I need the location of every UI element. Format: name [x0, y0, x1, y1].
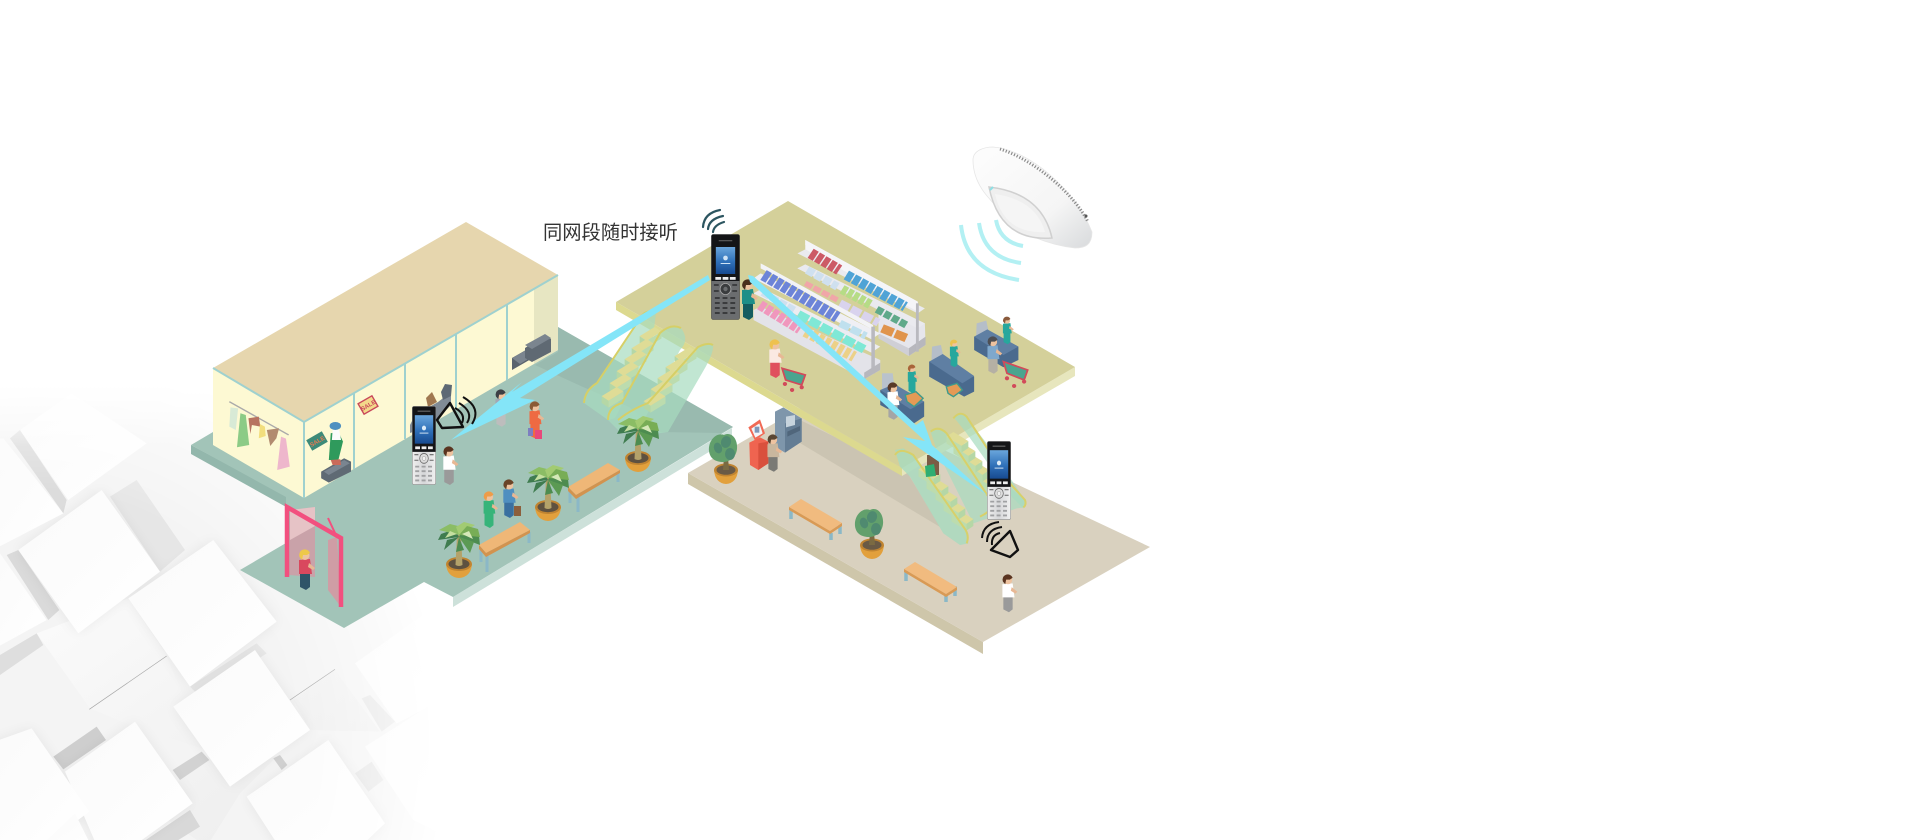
cashier 1 [908, 365, 919, 393]
person with bags [528, 401, 544, 439]
kiosk and ATM [748, 407, 802, 470]
steps [918, 432, 997, 531]
baskets [905, 383, 962, 407]
escalators: right pair to beige floor [895, 413, 1026, 545]
shelves and products [754, 240, 926, 379]
icon: speaker on green floor [437, 397, 475, 428]
phone: white handset on beige floor [987, 441, 1011, 520]
counter 2 [929, 345, 974, 397]
bench 2 [479, 522, 530, 572]
person at door [299, 549, 315, 590]
staff by dark phone [742, 279, 758, 320]
ATM [775, 407, 802, 453]
steps right [644, 347, 696, 413]
store roof [213, 222, 558, 422]
shopping carts [782, 362, 1028, 392]
cashier 3 [1003, 317, 1014, 344]
display benches [512, 334, 551, 370]
sign: red sale [358, 396, 378, 414]
sign: green sale [306, 431, 328, 451]
lower floor: beige level [688, 394, 1150, 654]
phone: white handset on green floor [412, 406, 436, 485]
upper floor: yellow level [616, 201, 1075, 476]
background: grey isometric tile pattern [0, 430, 395, 840]
icon: speaker on beige floor [982, 522, 1018, 557]
cashier 2 [950, 340, 961, 367]
mannequin on plinth [321, 422, 351, 483]
store building [213, 222, 558, 498]
bench 1 [568, 463, 620, 512]
signal arrow to beige floor [748, 275, 987, 495]
man in blue [503, 479, 521, 518]
icon: wifi over handset [703, 210, 724, 232]
escalators: left pair to green floor [584, 312, 713, 436]
person at front [1002, 574, 1017, 612]
shoe display [410, 384, 452, 433]
ceiling access point [973, 147, 1092, 248]
person at ATM [767, 434, 782, 472]
bench 3 [789, 499, 842, 540]
potted palm trees [438, 416, 659, 578]
ticket kiosk [748, 419, 768, 470]
sign: red sale: SALE [360, 400, 377, 413]
benches [479, 463, 957, 602]
shopper with cart [769, 339, 784, 378]
woman in green [484, 491, 498, 528]
sign: green sale: SALE [309, 436, 326, 449]
counter 3 [974, 321, 1018, 367]
potted round trees [709, 434, 884, 559]
phone: dark handset on upper floor [711, 234, 740, 320]
bench 4 [904, 562, 957, 602]
entrance door [287, 507, 341, 607]
customer 1 [887, 382, 902, 420]
store side walls [213, 368, 304, 498]
person on escalator [925, 455, 939, 477]
person grey [495, 389, 510, 427]
signal arrow to green floor [451, 275, 710, 440]
customer 3 [987, 336, 1002, 374]
signal waves from access point [961, 220, 1023, 280]
checkout counters [782, 321, 1028, 423]
front shelf [754, 263, 880, 379]
clothes rack [229, 402, 290, 470]
text: label: 同网段随时接听 [543, 222, 678, 244]
steps left [602, 327, 662, 408]
counter 1 [880, 373, 924, 423]
person near white phone [443, 446, 458, 485]
left floor: green level [191, 327, 733, 628]
shoppers and staff [299, 279, 1017, 612]
back shelf [797, 240, 926, 356]
